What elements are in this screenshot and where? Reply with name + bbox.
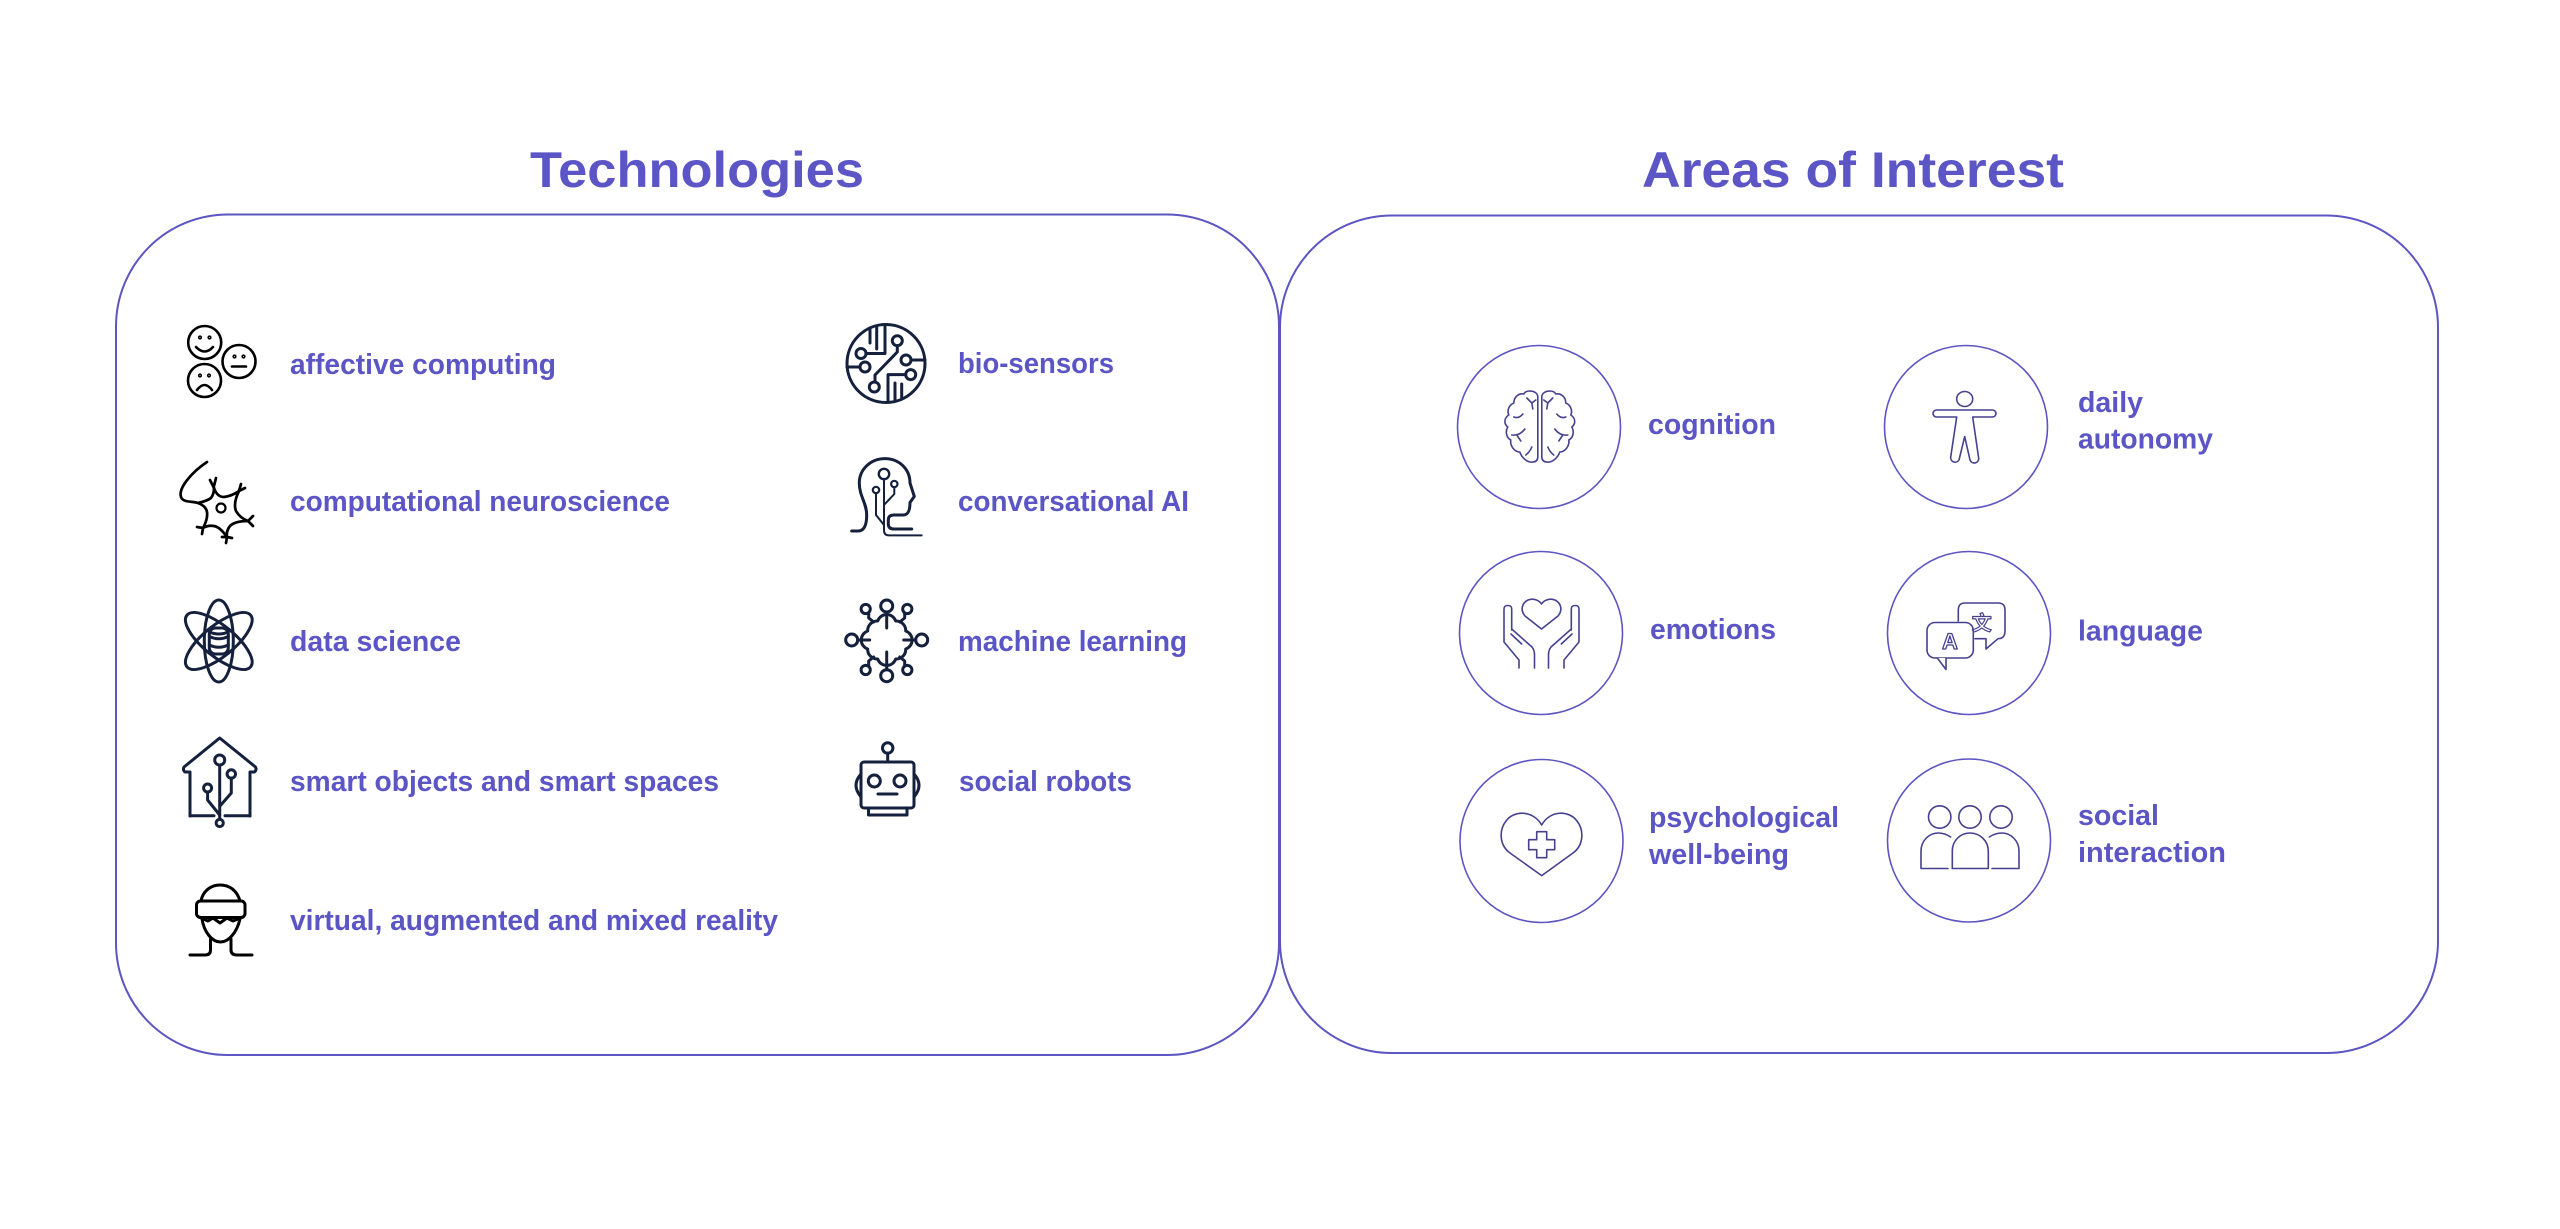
label: data science: data science [290,626,461,658]
item: language [1888,552,2203,714]
icon: smart home [183,738,256,827]
label: smart objects and smart spaces: smart objects and smart spaces [290,766,719,798]
label: social interaction: social [2078,800,2159,832]
circle: cognition [1458,346,1620,508]
circle: psychological well-being [1460,760,1623,922]
icon: atom with database [177,600,260,682]
label: cognition: cognition [1648,409,1776,441]
panel: technologies [116,214,1279,1055]
label: virtual, augmented and mixed reality: virtual, augmented and mixed reality [290,905,778,937]
circle: social interaction [1888,759,2050,922]
icon: brain [1505,391,1575,462]
icon: hands with heart [1504,599,1579,668]
label: emotions: emotions [1650,614,1776,646]
panel border: technologies [116,214,1279,1055]
label: computational neuroscience: computational neuroscience [290,486,670,518]
icon: affective computing faces [188,326,256,397]
panel border: areas of interest [1280,216,2438,1053]
title: Technologies: Technologies [530,142,864,198]
item: psychological well-being [1460,760,1839,922]
label: affective computing: affective computing [290,349,556,381]
label: psychological well-being: well-being [1648,839,1789,871]
icon: person with open arms [1933,392,1996,463]
icon: AI head [852,459,922,535]
label: psychological well-being: psychological [1649,802,1839,834]
icon: neuron [181,462,253,543]
circle: daily autonomy [1884,346,2048,508]
label: social interaction: interaction [2078,837,2226,869]
item: social interaction [1888,759,2226,922]
label: daily autonomy: daily [2078,387,2143,419]
icon: bio-sensors circuit [847,324,925,402]
icon: speech bubbles [1927,603,2005,670]
icon: three people [1921,806,2019,868]
panel: areas of interest [1280,216,2438,1053]
item: emotions [1460,552,1776,714]
label: bio-sensors: bio-sensors [958,348,1114,380]
icon: speech bubbles: A [1942,629,1958,654]
icon: speech bubbles: 文 [1972,611,1992,635]
label: language: language [2078,616,2203,648]
icon: VR headset person [190,885,252,955]
circle: language [1888,552,2050,714]
item: cognition [1458,346,1776,508]
circle: emotions [1460,552,1622,714]
label: conversational AI: conversational AI [958,486,1189,518]
title: Areas of Interest: Areas of Interest [1642,142,2064,198]
item: daily autonomy [1884,346,2213,508]
icon: robot [856,743,919,815]
icon: machine learning network [846,600,928,682]
label: machine learning: machine learning [958,626,1187,658]
icon: heart with cross [1501,813,1582,876]
label: daily autonomy: autonomy [2078,424,2213,456]
label: social robots: social robots [959,766,1132,798]
